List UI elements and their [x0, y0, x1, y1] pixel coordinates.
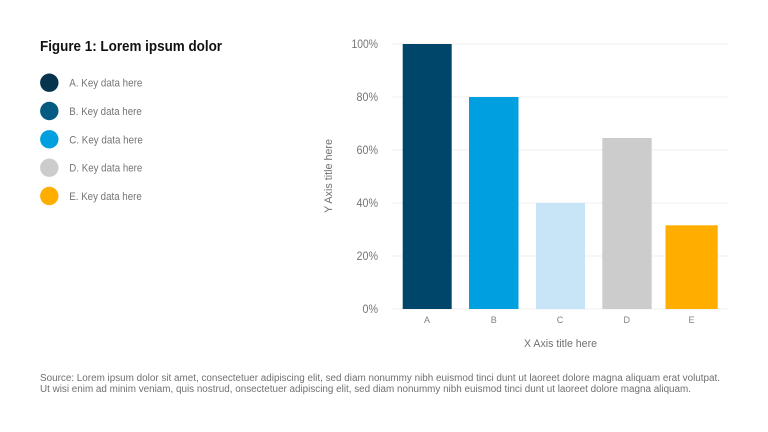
x axis category labels: D — [623, 315, 630, 325]
bar C — [536, 203, 585, 309]
bar A — [403, 44, 452, 309]
x axis category labels: E — [688, 315, 695, 325]
y axis tick labels: 20% — [356, 251, 378, 263]
x axis category labels: B — [491, 315, 497, 325]
bar D — [602, 138, 652, 309]
x axis title: X Axis title here — [524, 338, 597, 350]
source note — [40, 373, 720, 395]
y axis tick labels: 100% — [352, 39, 378, 51]
y axis tick labels: 80% — [356, 92, 378, 104]
y axis tick labels: 0% — [362, 304, 378, 316]
bar B — [469, 97, 518, 309]
x axis category labels: C — [557, 315, 564, 325]
bar E — [666, 225, 718, 309]
x axis category labels — [424, 315, 695, 325]
legend item D: D. Key data here — [69, 163, 142, 175]
y axis tick labels: 60% — [356, 145, 378, 157]
title: Figure 1: Lorem ipsum dolor — [40, 39, 222, 55]
y axis tick labels: 40% — [356, 198, 378, 210]
source note: Ut wisi enim ad minim veniam, quis nostrud, onsectetuer adipiscing elit, sed diam nonummy nibh euismod tinci dunt ut laoreet dolore magna aliquam. — [40, 384, 691, 395]
y axis tick labels — [352, 39, 378, 316]
legend item A: A. Key data here — [69, 78, 142, 90]
legend item C: C. Key data here — [69, 134, 143, 146]
x axis category labels: A — [424, 315, 430, 325]
y axis title: Y Axis title here — [323, 139, 335, 213]
bar chart — [323, 39, 728, 350]
legend item E: E. Key data here — [69, 191, 142, 203]
source note: Source: Lorem ipsum dolor sit amet, consectetuer adipiscing elit, sed diam nonummy nibh euismod tinci dunt ut laoreet dolore magna aliquam erat volutpat. — [40, 373, 720, 384]
legend item B: B. Key data here — [69, 106, 142, 118]
legend — [40, 74, 143, 205]
